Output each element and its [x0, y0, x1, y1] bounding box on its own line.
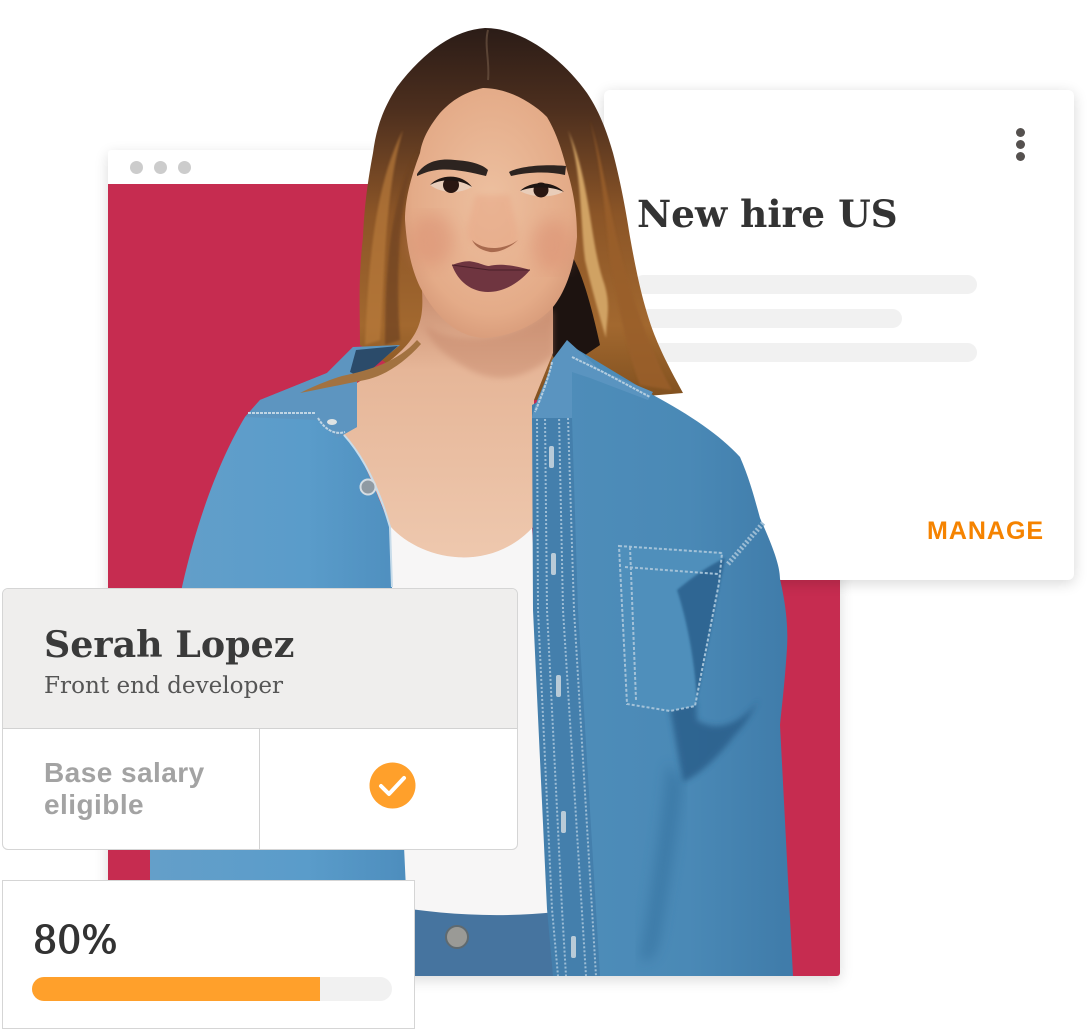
eyes and brows: [417, 160, 566, 198]
base salary label: Base salary: [44, 757, 205, 788]
neck shadow: [425, 310, 553, 378]
manage link: MANAGE: [927, 517, 1044, 545]
hair: [360, 28, 683, 400]
employee header: [3, 589, 517, 729]
collar lining shadow: [350, 346, 398, 378]
sleeve seam: [728, 522, 764, 564]
panel: browser window: [108, 150, 840, 976]
pocket stitching: [619, 546, 722, 711]
collar stitching: [248, 413, 345, 433]
jeans: [405, 905, 556, 976]
jacket right collar: [532, 340, 653, 418]
jeans button: [446, 926, 468, 948]
jacket pocket: [618, 545, 723, 711]
jacket left side: [150, 347, 410, 976]
progress value: 80%: [33, 918, 117, 962]
nose: [467, 195, 518, 252]
cell divider: [259, 729, 260, 849]
hair strand over collar: [300, 340, 421, 393]
pocket fold shadow: [677, 558, 725, 700]
panel: progress card: [2, 880, 415, 1029]
jacket placket: [532, 385, 600, 976]
white top: [386, 524, 556, 915]
lips: [452, 261, 530, 292]
panel: new hire card: [604, 90, 1074, 580]
icon: more menu: [1016, 128, 1025, 161]
browser window dots: [130, 161, 191, 174]
base salary label: eligible: [44, 789, 144, 820]
placeholder text lines: [638, 275, 977, 362]
denim jacket: [150, 340, 793, 976]
placket stitching: [537, 415, 596, 976]
jacket left collar: [245, 345, 400, 438]
crimson browser content: [108, 184, 840, 976]
cheek blush: [410, 214, 572, 271]
jacket left edge highlight: [344, 435, 392, 587]
employee name: Serah Lopez: [44, 623, 294, 666]
chest and neck: [343, 290, 553, 557]
jacket arm crease: [640, 763, 683, 961]
jacket snap button: [360, 480, 376, 494]
collar snap: [327, 419, 337, 425]
progress bar: [32, 977, 392, 1001]
heading: new hire: New hire US: [637, 192, 898, 236]
panel: employee card: [2, 588, 518, 850]
icon: check badge: [370, 762, 416, 808]
jacket right body: [532, 345, 793, 976]
placket buttonholes: [549, 446, 576, 958]
employee role: Front end developer: [44, 673, 283, 699]
base salary label: [44, 757, 205, 820]
face: [405, 88, 577, 338]
right collar edge stitching: [535, 357, 650, 412]
jacket arm shadow: [670, 698, 760, 782]
